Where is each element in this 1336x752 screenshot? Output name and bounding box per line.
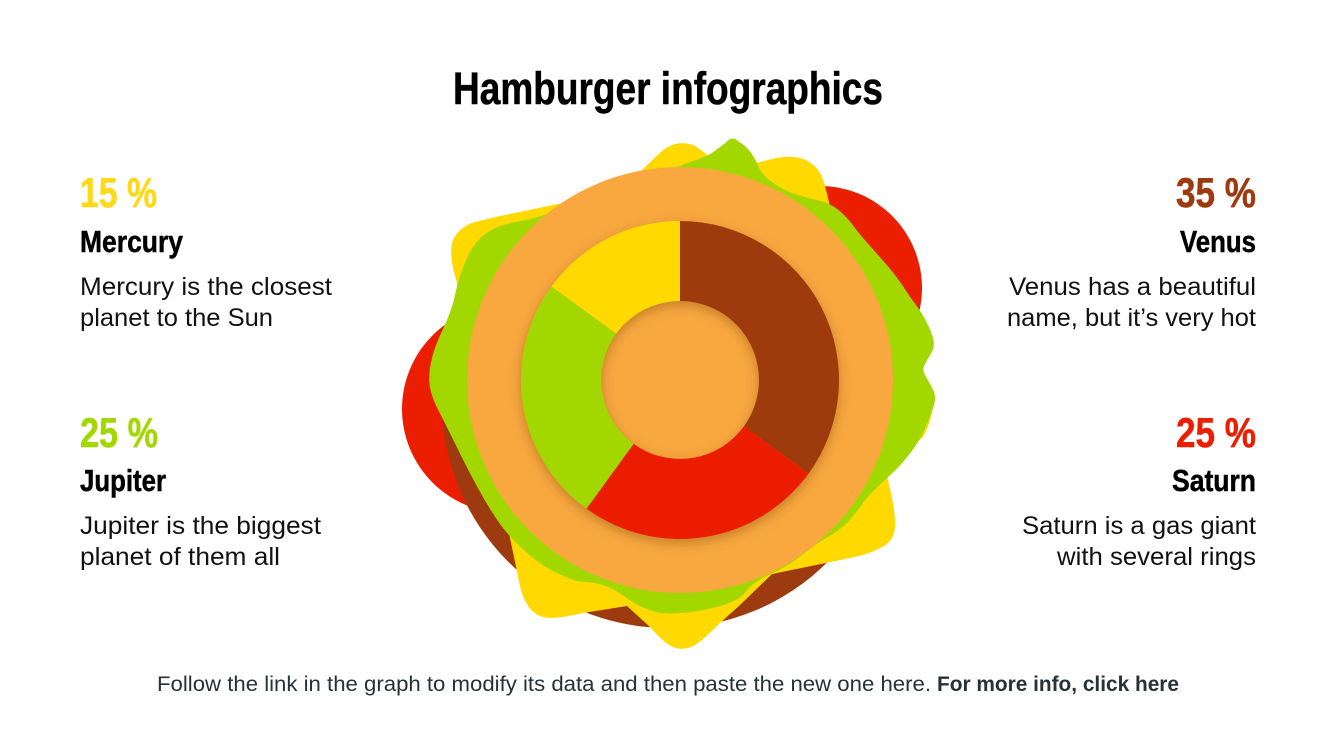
Mercury heading: Mercury — [80, 224, 184, 259]
Venus percentage: 35 % — [1176, 169, 1256, 216]
footer note: For more info, click here — [937, 672, 1179, 696]
tomato top right — [718, 186, 922, 390]
slice: Saturn 25% — [586, 426, 809, 539]
Venus description — [1007, 273, 1256, 332]
Jupiter description: planet of them all — [80, 543, 280, 571]
Saturn heading: Saturn — [1172, 463, 1256, 498]
Venus description: name, but it’s very hot — [1007, 304, 1256, 332]
patty — [442, 418, 827, 628]
Mercury percentage: 15 % — [80, 169, 157, 216]
title: Hamburger infographics — [453, 63, 883, 114]
bun disc — [467, 167, 893, 593]
Saturn percentage: 25 % — [1176, 409, 1256, 456]
slice: Mercury 15% — [551, 221, 680, 334]
panel: Venus — [1007, 169, 1256, 332]
Jupiter description: Jupiter is the biggest — [80, 512, 321, 540]
slice: Jupiter 25% — [521, 286, 634, 509]
slice: Venus 35% — [680, 221, 839, 474]
Venus description: Venus has a beautiful — [1009, 273, 1256, 301]
Jupiter heading: Jupiter — [80, 463, 166, 498]
Saturn description: Saturn is a gas giant — [1022, 512, 1256, 540]
cheese slice diamond — [440, 143, 932, 649]
panel: Saturn — [1022, 409, 1256, 571]
Mercury description: planet to the Sun — [80, 304, 273, 332]
donut chart — [521, 221, 839, 539]
cheese slice square — [451, 157, 895, 618]
footer note: Follow the link in the graph to modify its data and then paste the new one here. — [157, 672, 931, 696]
Saturn description — [1022, 512, 1256, 571]
tomato bottom left — [402, 305, 610, 513]
Jupiter description — [80, 512, 321, 571]
Mercury description: Mercury is the closest — [80, 273, 332, 301]
lettuce — [429, 138, 935, 613]
Venus heading: Venus — [1180, 224, 1256, 259]
hamburger chart — [402, 138, 935, 649]
panel: Mercury — [80, 169, 332, 332]
Mercury description — [80, 273, 332, 332]
Jupiter percentage: 25 % — [80, 409, 158, 456]
Saturn description: with several rings — [1056, 543, 1256, 571]
panel: Jupiter — [80, 409, 321, 571]
